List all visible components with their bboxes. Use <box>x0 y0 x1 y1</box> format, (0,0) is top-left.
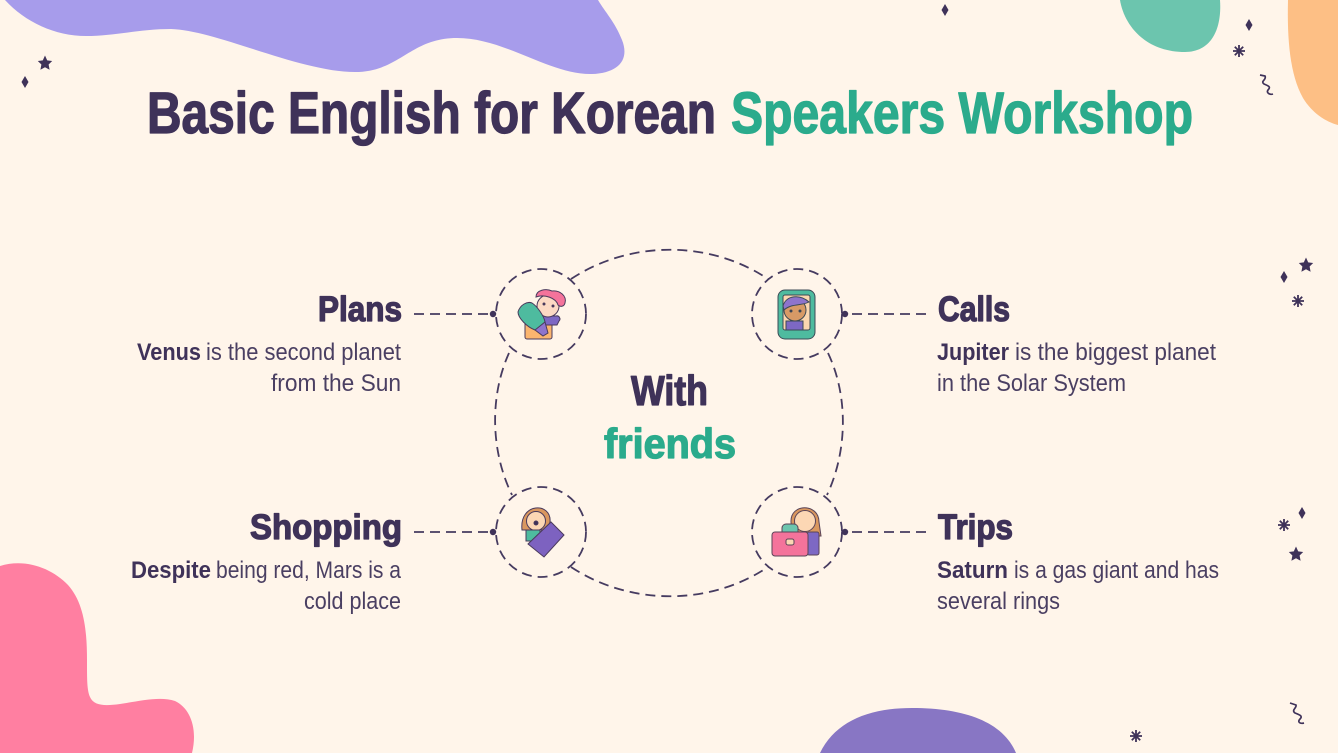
text block: Shopping: being red, Mars is a <box>216 557 402 584</box>
blob: lavender top left <box>5 0 624 74</box>
text block: Calls: is the biggest planet <box>1015 339 1216 366</box>
text block: Shopping <box>131 508 402 615</box>
text block: Plans <box>137 290 402 397</box>
center heading <box>604 367 736 467</box>
text block: Plans: from the Sun <box>271 370 401 397</box>
blob: pink bottom left <box>0 563 194 753</box>
text block: Plans: is the second planet <box>206 339 401 366</box>
blob: orange top right <box>1288 0 1338 125</box>
icon: child with briefcase <box>772 508 821 556</box>
text block: Calls <box>937 290 1216 397</box>
text block: Shopping: Shopping <box>250 508 402 547</box>
node: Calls <box>752 269 926 359</box>
blob: teal top right <box>1120 0 1220 52</box>
title: Speakers Workshop <box>731 81 1193 146</box>
diagram ring <box>495 250 843 596</box>
text block: Trips: several rings <box>937 588 1060 615</box>
node: Plans <box>414 269 586 359</box>
icon: child in phone <box>778 290 815 339</box>
text block: Calls: Jupiter <box>937 339 1009 366</box>
node: Trips <box>752 487 926 577</box>
text block: Shopping: cold place <box>304 588 401 615</box>
center heading: friends <box>604 420 736 467</box>
blob: purple bottom <box>820 708 1016 753</box>
text block: Trips: Saturn <box>937 557 1008 584</box>
text block: Trips: Trips <box>938 508 1013 547</box>
text block: Trips: is a gas giant and has <box>1014 557 1219 584</box>
title: Basic English for Korean <box>147 81 716 146</box>
icon: child with ticket <box>522 508 564 557</box>
node: Shopping <box>414 487 586 577</box>
text block: Plans: Plans <box>318 290 402 329</box>
center heading: With <box>631 367 708 414</box>
icon: child with pencil <box>518 290 565 339</box>
text block: Calls: Calls <box>938 290 1010 329</box>
title <box>147 81 1193 146</box>
text block: Shopping: Despite <box>131 557 211 584</box>
text block: Trips <box>937 508 1219 615</box>
text block: Plans: Venus <box>137 339 201 366</box>
text block: Calls: in the Solar System <box>937 370 1126 397</box>
